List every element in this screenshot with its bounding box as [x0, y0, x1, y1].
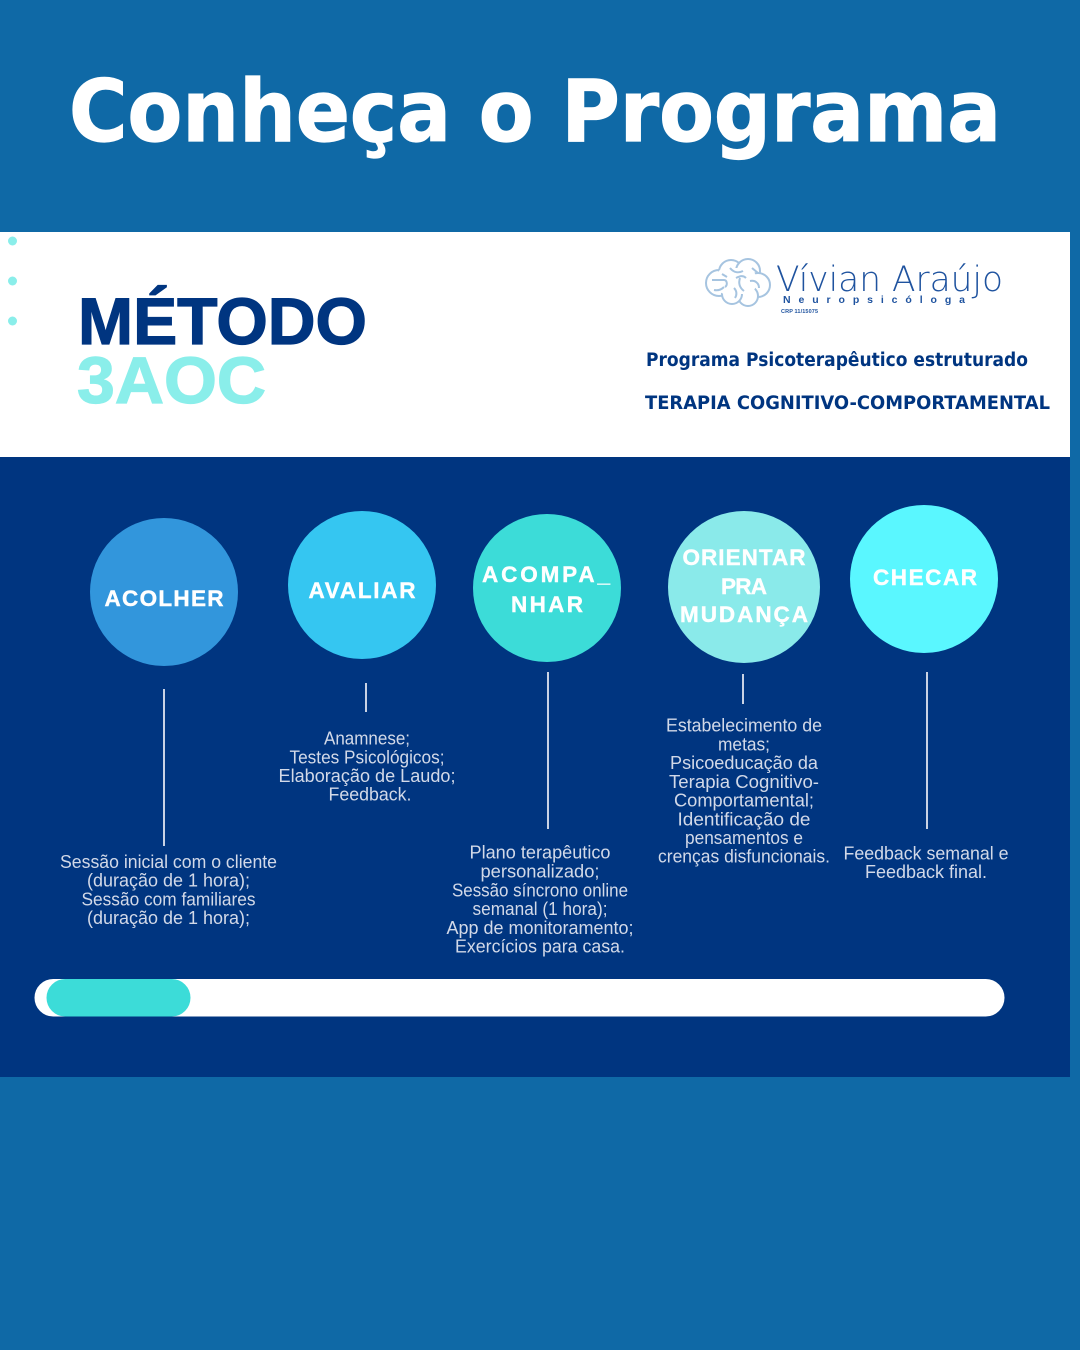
- step: orientar: pensamentos e: [685, 827, 803, 848]
- step: acompanhar: Exercícios para casa.: [455, 936, 625, 956]
- panel: header: [0, 232, 1070, 457]
- step: acolher: ACOLHER: [104, 586, 224, 611]
- step: acompanhar: personalizado;: [480, 860, 600, 882]
- logo registration: CRP 11/15075: [781, 309, 818, 315]
- step: orientar: crenças disfuncionais.: [658, 846, 830, 866]
- icon: brain: [706, 259, 770, 306]
- step: orientar: ORIENTAR: [682, 545, 806, 570]
- step: orientar: Identificação de: [678, 808, 810, 830]
- step: avaliar: Testes Psicológicos;: [290, 746, 444, 768]
- step: acompanhar: ACOMPA_: [482, 562, 610, 587]
- step: orientar: Estabelecimento de: [666, 714, 822, 736]
- therapy line: TERAPIA COGNITIVO-COMPORTAMENTAL: [645, 393, 1050, 414]
- step: avaliar: Feedback.: [328, 784, 412, 804]
- step: acompanhar: [446, 514, 634, 956]
- logo subtitle: Neuropsicóloga: [783, 294, 965, 306]
- step: checar: CHECAR: [873, 565, 977, 590]
- step: checar: Feedback final.: [865, 861, 987, 882]
- step: orientar: [658, 511, 830, 866]
- step: acolher: Sessão com familiares: [82, 888, 256, 910]
- step: checar: [844, 505, 1008, 882]
- heading: 3AOC: 3AOC: [77, 343, 266, 417]
- step: avaliar: [278, 511, 456, 804]
- step: orientar: Terapia Cognitivo-: [669, 771, 819, 792]
- step: acolher: (duração de 1 hora);: [87, 870, 250, 890]
- step: avaliar: Anamnese;: [324, 728, 410, 748]
- decorative dots: [8, 236, 17, 326]
- step: avaliar: Elaboração de Laudo;: [278, 765, 456, 786]
- step: acompanhar: semanal (1 hora);: [472, 898, 608, 919]
- step: orientar: MUDANÇA: [680, 602, 808, 627]
- step: avaliar: AVALIAR: [308, 578, 416, 603]
- logo name: Vívian Araújo: [776, 260, 1003, 300]
- step: orientar: metas;: [718, 734, 770, 754]
- step: orientar: Psicoeducação da: [670, 752, 819, 773]
- step: acompanhar: Sessão síncrono online: [452, 880, 628, 900]
- step: acompanhar: NHAR: [511, 592, 583, 617]
- step: acompanhar: Plano terapêutico: [470, 842, 610, 862]
- heading: método: MÉTODO: [78, 284, 367, 358]
- panel: method steps: [0, 457, 1070, 1077]
- step: checar: Feedback semanal e: [844, 842, 1008, 864]
- program line: Programa Psicoterapêutico estruturado: [646, 350, 1028, 371]
- logo: [706, 259, 1003, 315]
- step: acolher: Sessão inicial com o cliente: [60, 851, 277, 872]
- step: acompanhar: App de monitoramento;: [446, 917, 634, 938]
- step: orientar: Comportamental;: [674, 790, 814, 810]
- title: Conheça o Programa: [69, 62, 1001, 162]
- step: acolher: [60, 518, 277, 928]
- step: acolher: (duração de 1 hora);: [87, 907, 250, 928]
- step: orientar: PRA: [721, 574, 767, 599]
- progress bar: [34, 979, 1004, 1016]
